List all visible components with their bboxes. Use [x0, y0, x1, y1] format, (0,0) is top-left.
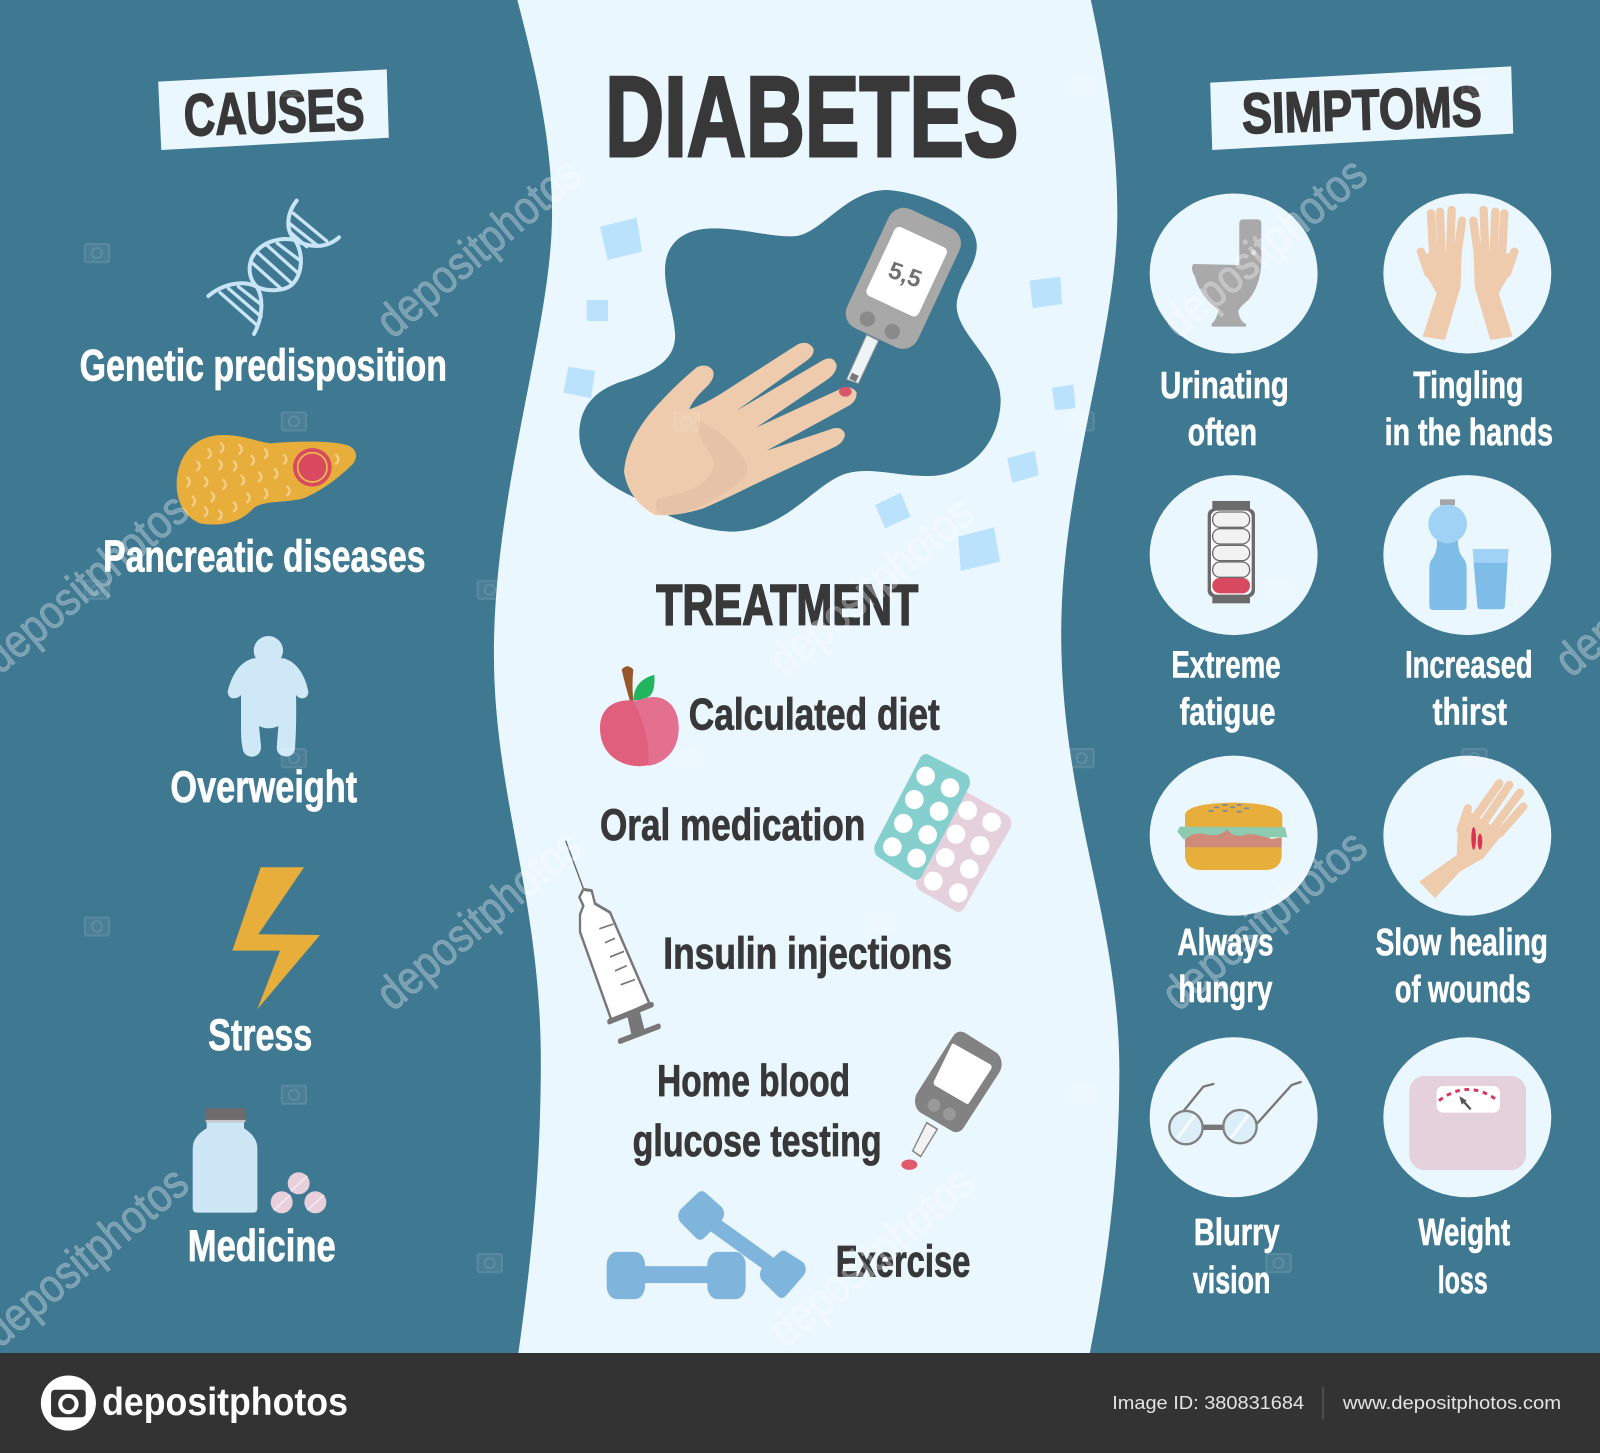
label: increased thirst — [1405, 644, 1533, 732]
icon: glasses — [1169, 1082, 1301, 1144]
label: always hungry: Always — [1178, 921, 1273, 963]
circle backgrounds — [1150, 193, 1551, 1197]
label: slow healing of wounds: Slow healing — [1375, 921, 1548, 963]
logo icon — [41, 1375, 96, 1431]
icon: lightning — [232, 867, 320, 1009]
icon: dumbbells — [607, 1200, 799, 1299]
label: increased thirst: thirst — [1433, 690, 1507, 732]
footer bar — [0, 1353, 1600, 1453]
watermarks: depositphotos — [366, 819, 591, 1020]
label: increased thirst: Increased — [1405, 644, 1533, 686]
label: urinating often: Urinating — [1160, 364, 1289, 406]
label: blurry vision — [1193, 1211, 1280, 1301]
label: insulin injections: Insulin injections — [663, 927, 952, 978]
heading: simptoms: SIMPTOMS — [1241, 75, 1483, 146]
label: stress: Stress — [208, 1009, 312, 1060]
icon: medicine bottle and pills — [193, 1108, 326, 1213]
label: blurry vision: vision — [1193, 1259, 1270, 1301]
icon: pancreas — [177, 435, 356, 524]
watermarks: depositphotos — [1152, 147, 1376, 347]
icon: water bottle and glass — [1428, 499, 1509, 610]
glucose meter — [840, 202, 966, 383]
label: tingling in the hands: Tingling — [1413, 364, 1523, 406]
icon: dna — [208, 201, 339, 334]
label: home blood glucose testing — [633, 1055, 882, 1166]
panel: center — [563, 54, 1075, 1299]
icon: apple — [600, 666, 679, 766]
label: slow healing of wounds: of wounds — [1395, 968, 1531, 1010]
label: tingling in the hands — [1385, 364, 1553, 453]
label: extreme fatigue — [1171, 644, 1281, 732]
label: blurry vision: Blurry — [1194, 1211, 1280, 1253]
hand — [624, 343, 857, 515]
heading: causes: CAUSES — [183, 75, 365, 149]
panel: symptoms — [1150, 66, 1553, 1301]
label: always hungry: hungry — [1179, 968, 1272, 1010]
logo text: depositphotos — [102, 1381, 348, 1424]
label: home blood glucose testing: glucose testing — [633, 1115, 882, 1166]
watermarks: depositphotos — [366, 147, 591, 347]
illustration: glucose meter on finger — [579, 190, 1001, 532]
label: slow healing of wounds — [1375, 921, 1548, 1010]
label: extreme fatigue: Extreme — [1171, 644, 1281, 686]
decorative squares — [563, 218, 1075, 571]
label: exercise: Exercise — [836, 1235, 970, 1286]
label: extreme fatigue: fatigue — [1180, 690, 1275, 732]
icon: home meter — [901, 1045, 992, 1170]
icon: battery — [1208, 501, 1255, 603]
icon: toilet — [1192, 219, 1261, 327]
label: pancreatic diseases: Pancreatic diseases — [103, 530, 426, 581]
label: calculated diet: Calculated diet — [689, 689, 940, 740]
label: weight loss: loss — [1438, 1259, 1488, 1301]
label: always hungry — [1178, 921, 1273, 1010]
label: weight loss — [1418, 1211, 1510, 1301]
blob — [579, 190, 1001, 532]
label: home blood glucose testing: Home blood — [657, 1055, 850, 1106]
icon: blister packs — [882, 764, 1004, 902]
label: oral medication: Oral medication — [600, 799, 865, 850]
icon: burger — [1177, 803, 1287, 870]
panel: causes — [80, 69, 447, 1271]
icon: weighing scale — [1409, 1076, 1526, 1170]
image id: Image ID: 380831684 — [1112, 1392, 1304, 1413]
label: urinating often — [1160, 364, 1289, 453]
label: medicine: Medicine — [188, 1220, 336, 1271]
panel: central wave — [494, 0, 1119, 1353]
watermarks: depositphotos — [759, 486, 984, 686]
icon: wounded hand — [1419, 783, 1523, 898]
watermarks: depositphotos — [759, 1156, 984, 1357]
label: urinating often: often — [1188, 411, 1257, 453]
glucose meter: 5,5 — [885, 257, 925, 294]
label: overweight: Overweight — [170, 761, 357, 812]
heading: treatment: TREATMENT — [656, 573, 918, 637]
website: www.depositphotos.com — [1342, 1392, 1561, 1413]
title: DIABETES — [605, 54, 1018, 181]
icon: overweight figure — [228, 636, 308, 757]
icon: syringe — [566, 841, 659, 1041]
label: genetic predisposition: Genetic predisposition — [80, 340, 447, 391]
label: weight loss: Weight — [1418, 1211, 1510, 1253]
watermarks: depositphotos — [1152, 819, 1376, 1020]
icon: hands — [1421, 210, 1514, 340]
